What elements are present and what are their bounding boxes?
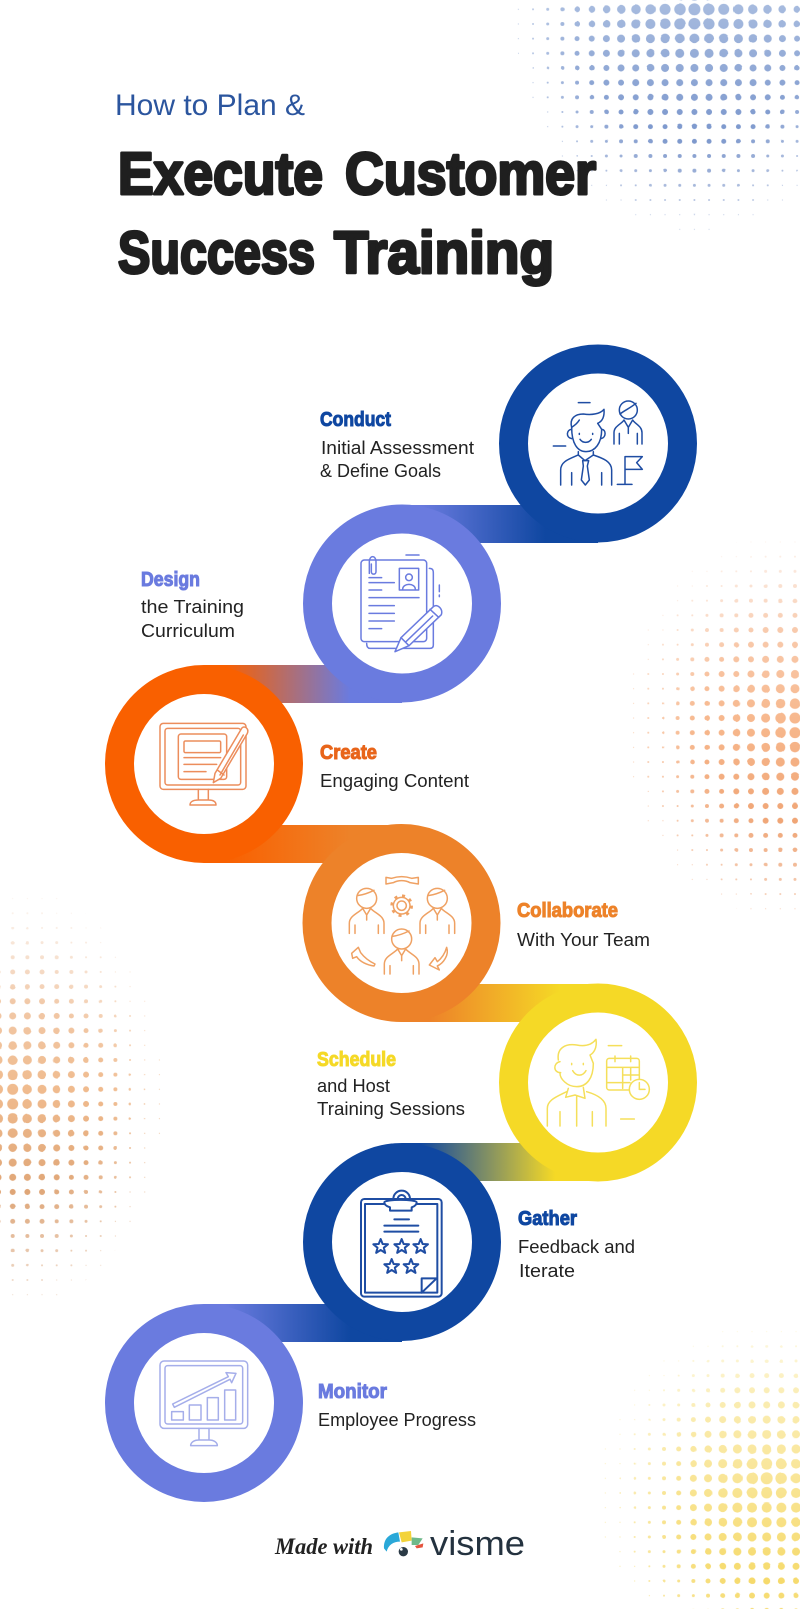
label: Feedback and bbox=[518, 1237, 635, 1257]
label: Initial Assessment bbox=[321, 438, 474, 458]
ring bbox=[317, 838, 486, 1008]
ring bbox=[318, 519, 486, 688]
ring bbox=[318, 1158, 486, 1326]
ring bbox=[120, 1318, 288, 1488]
label: & Define Goals bbox=[320, 461, 441, 481]
visme wordmark: visme bbox=[430, 1525, 525, 1563]
icon: people and flag bbox=[553, 401, 642, 485]
connector: step 1 to 2 bbox=[402, 505, 598, 543]
label: Monitor bbox=[318, 1381, 387, 1403]
step 5: Schedule bbox=[317, 998, 682, 1167]
icon: monitor with growth chart bbox=[160, 1361, 248, 1446]
main title: Success bbox=[118, 220, 315, 286]
label bbox=[320, 742, 469, 791]
step 3: Create bbox=[120, 680, 469, 848]
title block bbox=[115, 89, 596, 286]
connector: step 6 to 7 bbox=[204, 1304, 402, 1342]
main title: Execute bbox=[118, 141, 323, 207]
icon: person with calendar bbox=[547, 1039, 649, 1126]
main title: Training bbox=[334, 220, 554, 286]
label: Gather bbox=[518, 1208, 577, 1230]
connector: step 4 to 5 bbox=[402, 984, 598, 1022]
label bbox=[320, 409, 474, 481]
halftone dots: blue top right bbox=[518, 0, 800, 230]
label: Schedule bbox=[317, 1049, 396, 1071]
main title: Customer bbox=[345, 141, 596, 207]
halftone dots: yellow bottom right bbox=[604, 1331, 800, 1609]
label: Create bbox=[320, 742, 377, 764]
step 4: Collaborate bbox=[317, 838, 650, 1008]
logo mark bbox=[384, 1531, 423, 1556]
step 7: Monitor bbox=[120, 1318, 476, 1488]
label: Training Sessions bbox=[317, 1099, 465, 1119]
label: Engaging Content bbox=[320, 771, 469, 791]
step 6: Gather bbox=[318, 1158, 635, 1326]
label: With Your Team bbox=[517, 930, 650, 950]
connector: step 2 to 3 bbox=[204, 665, 402, 703]
label: Curriculum bbox=[141, 621, 235, 641]
step 2: Design bbox=[141, 519, 486, 688]
icon: clipboard with stars bbox=[361, 1191, 442, 1297]
label bbox=[518, 1208, 635, 1281]
made with script: Made with bbox=[274, 1534, 373, 1559]
footer: made with visme bbox=[274, 1525, 525, 1563]
icon: team with gear bbox=[349, 877, 455, 974]
icon: document and pen bbox=[361, 555, 442, 652]
ring bbox=[120, 680, 288, 848]
main title bbox=[118, 141, 596, 286]
label: Design bbox=[141, 569, 200, 591]
label: Collaborate bbox=[517, 900, 618, 922]
connector: step 5 to 6 bbox=[402, 1143, 598, 1181]
icon: monitor with document and pen bbox=[160, 723, 248, 805]
label: and Host bbox=[317, 1076, 390, 1096]
label bbox=[318, 1381, 476, 1430]
ring bbox=[514, 359, 682, 528]
ring bbox=[514, 998, 682, 1167]
connector: step 3 to 4 bbox=[204, 825, 402, 863]
label bbox=[517, 900, 650, 950]
halftone dots: orange left bbox=[0, 898, 160, 1296]
step 1: Conduct bbox=[320, 359, 682, 528]
label bbox=[317, 1049, 465, 1119]
label: Employee Progress bbox=[318, 1410, 476, 1430]
subtitle: How to Plan & bbox=[115, 89, 305, 122]
halftone dots: orange right bbox=[633, 542, 800, 910]
label: Iterate bbox=[519, 1261, 575, 1281]
label: Conduct bbox=[320, 409, 391, 431]
label bbox=[141, 569, 244, 641]
label: the Training bbox=[141, 597, 244, 617]
